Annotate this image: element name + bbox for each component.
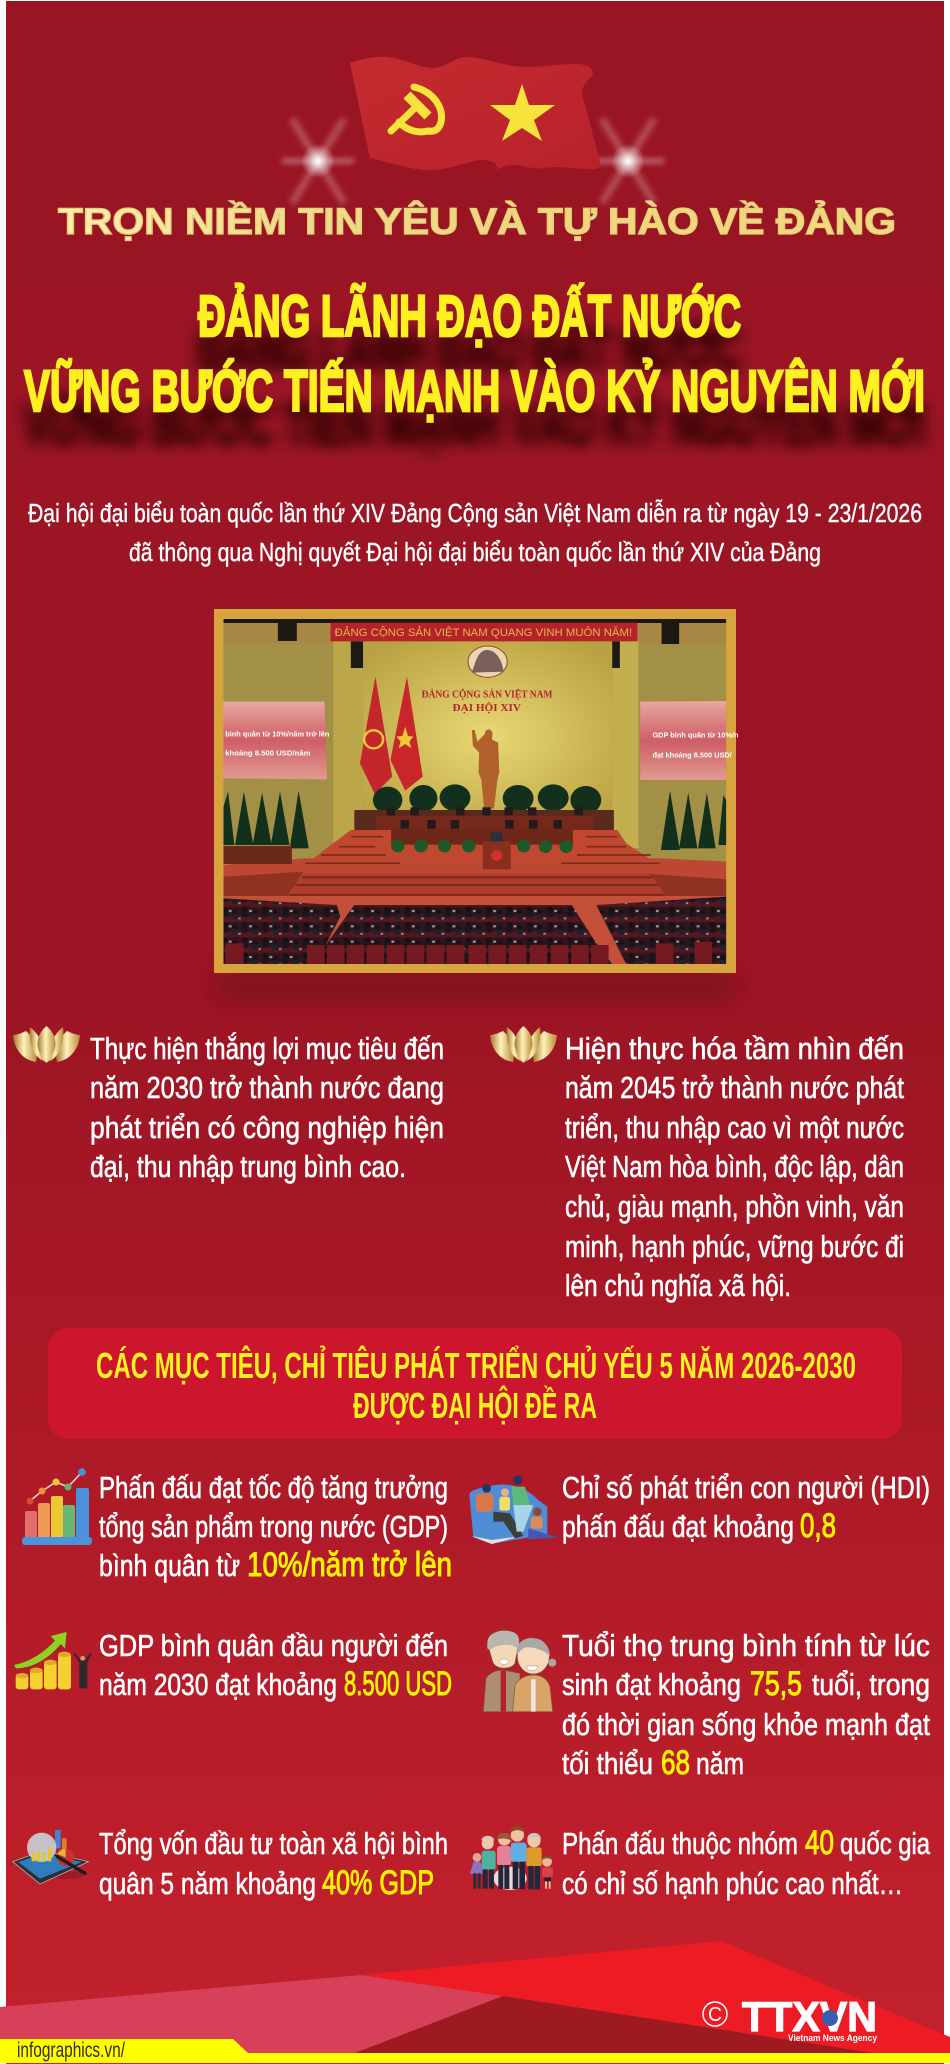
icon: extended family (470, 1826, 553, 1890)
line: phát triển có công nghiệp hiện (90, 1110, 444, 1145)
photo: congress hall: ĐẢNG CỘNG SẢN VIỆT NAM QUANG VINH MUÔN NĂM! (335, 626, 632, 639)
photo: congress hall: khoảng 8.500 USD/năm (225, 749, 311, 758)
photo: congress hall: bình quân từ 10%/năm trở lên (225, 731, 329, 739)
footer: yellow strip (0, 2039, 950, 2063)
line: bình quân từ (99, 1548, 240, 1583)
intro text (28, 498, 922, 567)
line: Hiện thực hóa tầm nhìn đến (565, 1031, 904, 1066)
line: Thực hiện thắng lợi mục tiêu đến (90, 1031, 444, 1066)
icon: lotus right (490, 1026, 557, 1063)
line: tổng sản phẩm trong nước (GDP) (99, 1509, 448, 1544)
text: GDP per capita (99, 1628, 452, 1703)
footer: bright red shape (361, 1941, 950, 2054)
footer: dark shape (355, 1996, 880, 2053)
line: Phấn đấu đạt tốc độ tăng trưởng (99, 1470, 448, 1505)
footer: pink shape (0, 1975, 503, 2053)
source text: infographics.vn/ (17, 2039, 125, 2062)
icon: growth chart (22, 1468, 92, 1545)
footer shapes (0, 1941, 950, 2063)
highlight: 40% GDP (322, 1864, 434, 1902)
icon: flare right (592, 119, 664, 203)
text: HDI target (562, 1470, 930, 1545)
line: năm 2030 đạt khoảng (99, 1667, 337, 1702)
text: goal 2030 (90, 1031, 444, 1184)
highlight: 8.500 USD (344, 1665, 452, 1703)
text: investment (99, 1826, 448, 1902)
icon: lotus left (13, 1026, 80, 1063)
icon: tablet with charts (13, 1830, 88, 1884)
text: GDP growth target (99, 1470, 452, 1584)
line: phấn đấu đạt khoảng (562, 1509, 794, 1544)
line: GDP bình quân đầu người đến (99, 1628, 448, 1663)
photo: congress hall (214, 609, 739, 973)
logo: TTXVN (703, 1993, 878, 2044)
text: life expectancy (562, 1628, 930, 1782)
photo: congress hall: ĐẠI HỘI XIV (453, 701, 521, 714)
photo: congress hall: đạt khoảng 8.500 USD/ (652, 751, 732, 759)
line: đại, thu nhập trung bình cao. (90, 1149, 406, 1184)
copyright mark (703, 2002, 727, 2026)
copyright mark: C (708, 2004, 722, 2026)
title: gold subtitle: TRỌN NIỀM TIN YÊU VÀ TỰ HÀO VỀ ĐẢNG (58, 200, 896, 242)
icon: coins and rising arrow (14, 1632, 92, 1689)
line: Tổng vốn đầu tư toàn xã hội bình (99, 1826, 448, 1861)
logo tagline: Vietnam News Agency (788, 2033, 878, 2044)
line: quân 5 năm khoảng (99, 1866, 316, 1901)
photo frame (214, 609, 736, 973)
title: main headline (24, 284, 925, 424)
section banner (48, 1328, 902, 1439)
line: Phấn đấu thuộc nhóm (562, 1826, 798, 1861)
flag emblem (282, 57, 664, 203)
highlight: 75,5 (750, 1665, 802, 1703)
text: vision 2045 (565, 1031, 904, 1303)
highlight: 10%/năm trở lên (247, 1546, 452, 1584)
icon: family on sofa (469, 1475, 558, 1544)
banner in photo (330, 623, 637, 641)
line: tuổi, trong (812, 1667, 930, 1702)
icon: flare left (282, 119, 354, 203)
icon: waving flag (350, 57, 600, 170)
line: lên chủ nghĩa xã hội. (565, 1268, 791, 1303)
line: năm (696, 1746, 744, 1781)
banner line 2: ĐƯỢC ĐẠI HỘI ĐỀ RA (353, 1384, 597, 1426)
highlight: 40 (805, 1824, 834, 1862)
logo globe (822, 2010, 838, 2026)
icon: hammer and sickle (391, 87, 442, 132)
text: happiness target (562, 1824, 931, 1901)
photo: congress hall: GDP bình quân từ 10%/n (652, 731, 739, 739)
icon: elderly couple (483, 1631, 556, 1712)
logo wordmark: TTXVN (742, 1993, 877, 2040)
photo: congress hall: ĐẢNG CỘNG SẢN VIỆT NAM (422, 688, 553, 701)
banner background (48, 1328, 902, 1439)
line: năm 2030 trở thành nước đang (90, 1070, 444, 1105)
highlight: 68 (661, 1744, 690, 1782)
photo shadow (215, 972, 735, 1002)
highlight: 0,8 (800, 1507, 836, 1545)
icon: star (490, 84, 555, 141)
line: sinh đạt khoảng (562, 1667, 741, 1702)
line: tối thiểu (562, 1746, 653, 1781)
